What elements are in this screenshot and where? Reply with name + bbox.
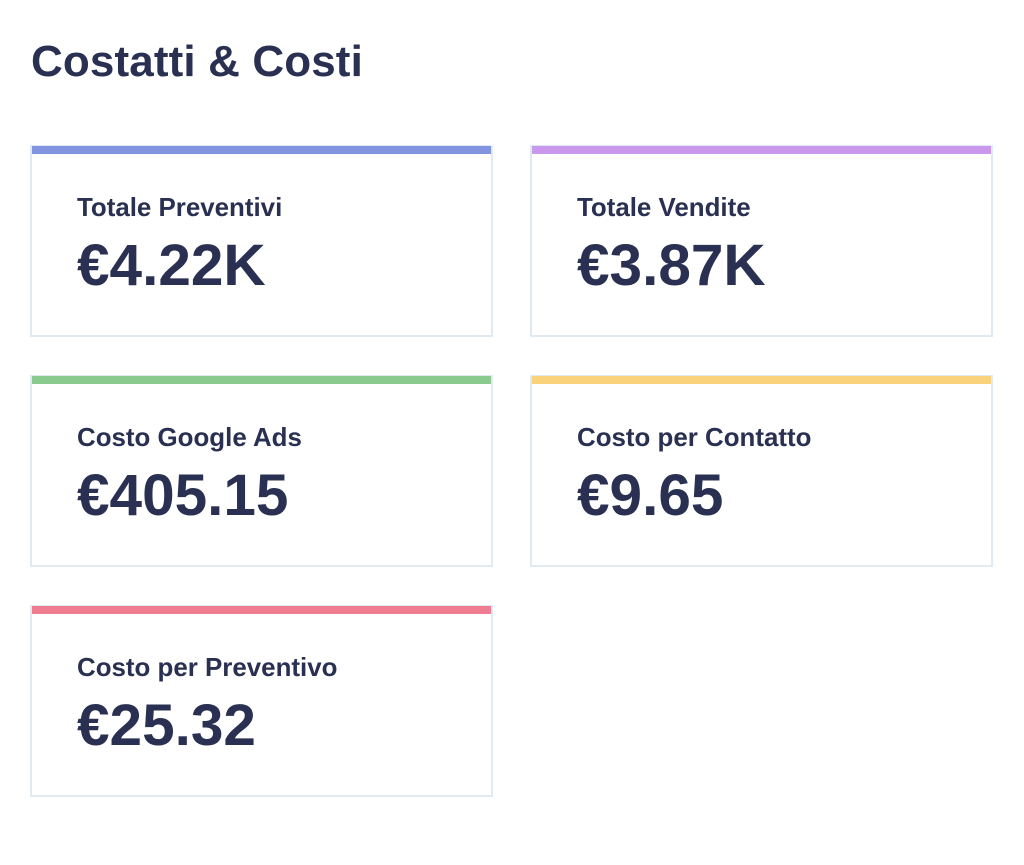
panel: Costo per Contatto [530, 375, 993, 567]
title: Costatti & Costi [31, 37, 363, 86]
value: €3.87K: €3.87K [577, 233, 766, 298]
value: €25.32: €25.32 [77, 693, 256, 758]
accent bar: blue [32, 146, 491, 154]
value: €4.22K: €4.22K [77, 233, 266, 298]
value: €405.15: €405.15 [77, 463, 288, 528]
panel: Costo Google Ads [30, 375, 493, 567]
value: €9.65: €9.65 [577, 463, 723, 528]
label: Costo per Preventivo: Costo per Preventivo [77, 654, 337, 682]
label: Costo Google Ads: Costo Google Ads [77, 424, 302, 452]
accent bar: purple [532, 146, 991, 154]
panel: Totale Vendite [530, 145, 993, 337]
accent bar: pink [32, 606, 491, 614]
panel: Costo per Preventivo [30, 605, 493, 797]
accent bar: yellow [532, 376, 991, 384]
label: Totale Preventivi: Totale Preventivi [77, 194, 282, 222]
panel: Totale Preventivi [30, 145, 493, 337]
label: Totale Vendite: Totale Vendite [577, 194, 751, 222]
label: Costo per Contatto: Costo per Contatto [577, 424, 811, 452]
accent bar: green [32, 376, 491, 384]
